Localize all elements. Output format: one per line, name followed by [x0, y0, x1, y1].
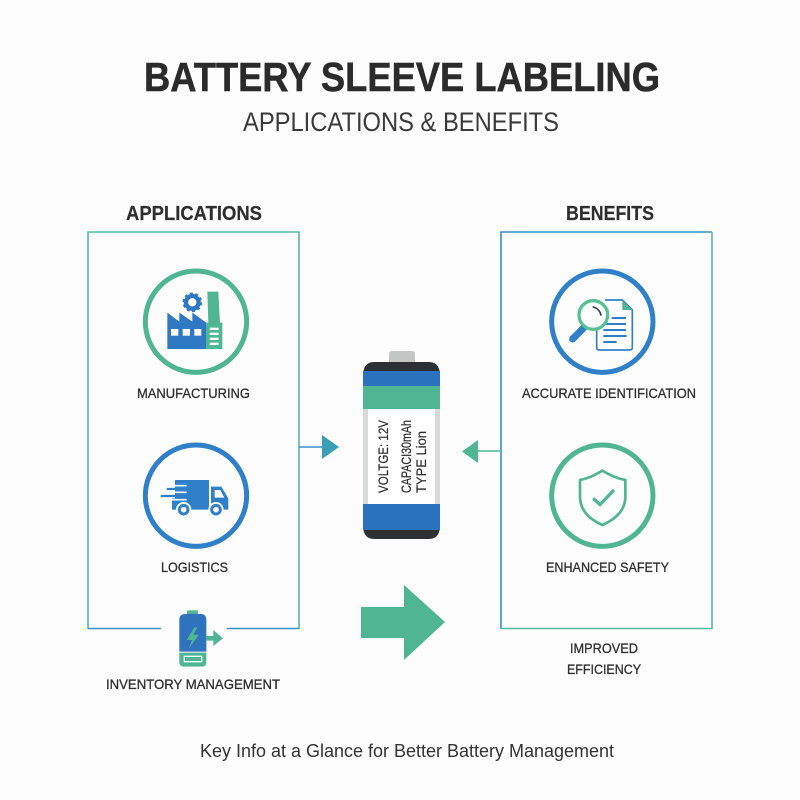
label: accurate identification: ACCURATE IDENTIFICATION [522, 385, 696, 401]
icon: accurate identification [552, 271, 653, 372]
battery label text: VOLTGE: 12V [376, 420, 391, 493]
label: improved efficiency: EFFICIENCY [567, 661, 642, 677]
label: enhanced safety: ENHANCED SAFETY [546, 559, 670, 575]
label: inventory management: INVENTORY MANAGEMENT [106, 676, 280, 692]
battery illustration [363, 351, 440, 539]
panel: applications [88, 232, 299, 667]
heading: benefits: BENEFITS [566, 202, 654, 225]
heading: applications: APPLICATIONS [126, 202, 262, 225]
arrow: large green [361, 585, 445, 660]
icon: enhanced safety shield [552, 445, 653, 546]
subtitle: APPLICATIONS & BENEFITS [243, 107, 559, 137]
footer tagline: Key Info at a Glance for Better Battery Management [200, 741, 614, 761]
battery label text [376, 420, 429, 493]
label: manufacturing: MANUFACTURING [137, 385, 250, 401]
icon: logistics truck [145, 445, 247, 546]
battery label text: CAPACI30mAh [399, 420, 414, 493]
label: logistics: LOGISTICS [161, 559, 228, 575]
battery label text: TYPE Lion [414, 431, 429, 493]
panel: benefits [501, 232, 712, 629]
icon: manufacturing [145, 271, 247, 372]
arrow: applications to battery [299, 435, 339, 459]
title: BATTERY SLEEVE LABELING [144, 54, 660, 100]
label: improved efficiency: IMPROVED [570, 640, 638, 656]
label: improved efficiency [567, 640, 642, 677]
arrow: benefits to battery [462, 440, 501, 463]
icon: inventory battery [179, 610, 223, 667]
